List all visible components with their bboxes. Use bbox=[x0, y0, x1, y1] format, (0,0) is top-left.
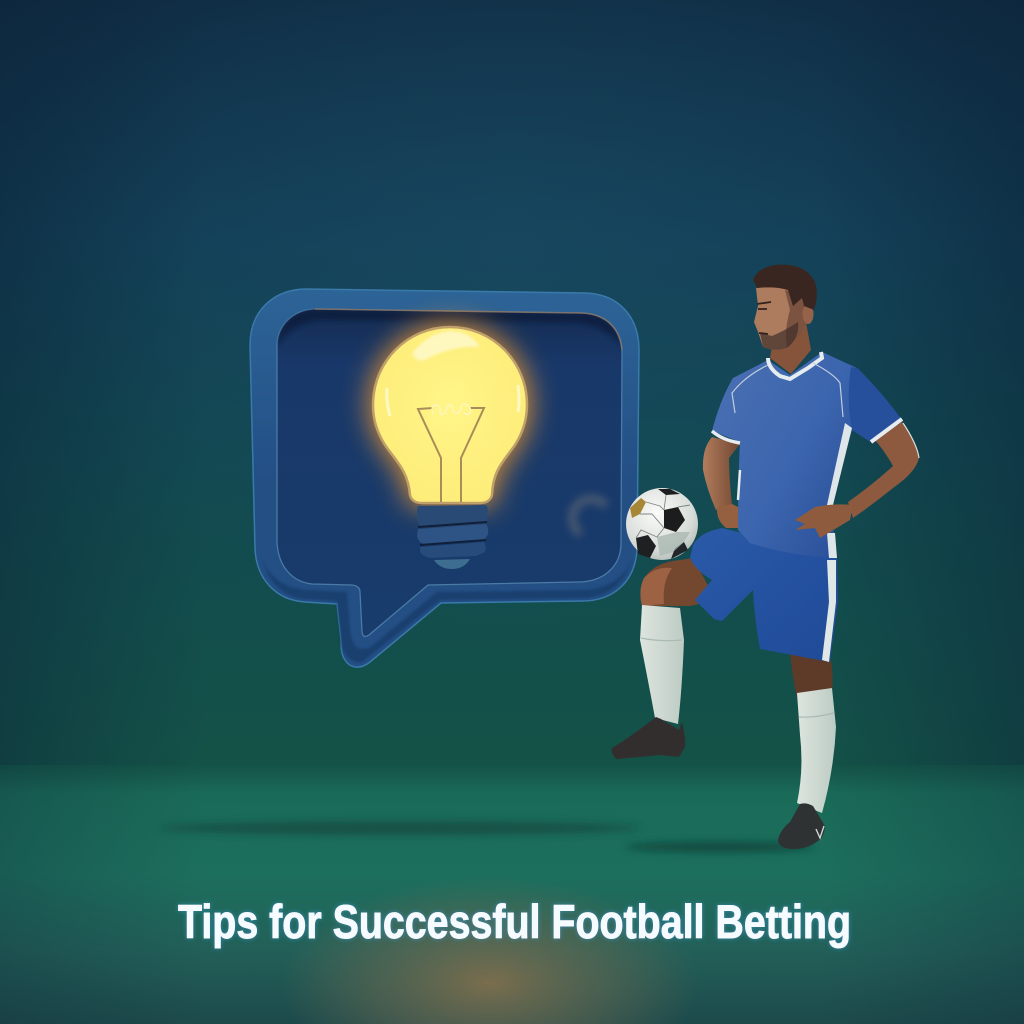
floor bbox=[0, 765, 1024, 1024]
jersey right sleeve shade bbox=[849, 367, 902, 443]
ear bbox=[802, 304, 814, 324]
raised thigh and knee bbox=[640, 558, 716, 606]
title: Tips for Successful Football Betting bbox=[178, 895, 851, 948]
left hand bbox=[717, 504, 748, 528]
faint ball reflection bbox=[572, 499, 606, 534]
football player bbox=[612, 265, 919, 849]
bulb highlight bbox=[413, 331, 480, 360]
ball panels bbox=[664, 507, 685, 532]
bulb glow bbox=[373, 327, 527, 503]
side highlights bbox=[387, 385, 519, 416]
eye and mouth bbox=[757, 302, 771, 334]
jersey bbox=[712, 352, 902, 558]
filament bbox=[418, 404, 484, 502]
bubble lower rim shading bbox=[262, 560, 632, 662]
raised sock bbox=[640, 605, 684, 724]
bubble inner panel bbox=[277, 309, 622, 636]
jersey trims bbox=[712, 352, 902, 500]
central grey panel bbox=[657, 532, 690, 556]
beard bbox=[760, 322, 798, 350]
face shadow bbox=[785, 290, 812, 348]
bubble outer frame bbox=[250, 289, 639, 667]
shorts bbox=[690, 528, 838, 662]
standing sock fold bbox=[799, 713, 834, 717]
background wall bbox=[0, 0, 1024, 790]
football bbox=[626, 488, 698, 560]
speech bubble bbox=[250, 289, 639, 667]
bulb screw base bbox=[417, 505, 488, 569]
raised sock fold bbox=[641, 638, 682, 641]
arm rim light bbox=[903, 423, 919, 458]
hair bbox=[753, 265, 817, 310]
face bbox=[754, 284, 812, 350]
right arm bbox=[848, 422, 919, 518]
right hand bbox=[795, 504, 853, 538]
standing sock bbox=[797, 688, 836, 813]
jersey side panel bbox=[827, 423, 852, 505]
standing boot bbox=[778, 803, 825, 849]
neck bbox=[770, 322, 811, 374]
inner top shadow and rim reflection bbox=[277, 309, 620, 345]
shorts side stripe bbox=[822, 560, 836, 662]
floor shadows bbox=[160, 821, 815, 852]
raised boot bbox=[612, 717, 685, 759]
light bulb glass bbox=[373, 327, 527, 503]
standing leg bbox=[790, 652, 833, 698]
jersey hem stripe bbox=[827, 533, 837, 558]
left arm bbox=[703, 437, 740, 510]
